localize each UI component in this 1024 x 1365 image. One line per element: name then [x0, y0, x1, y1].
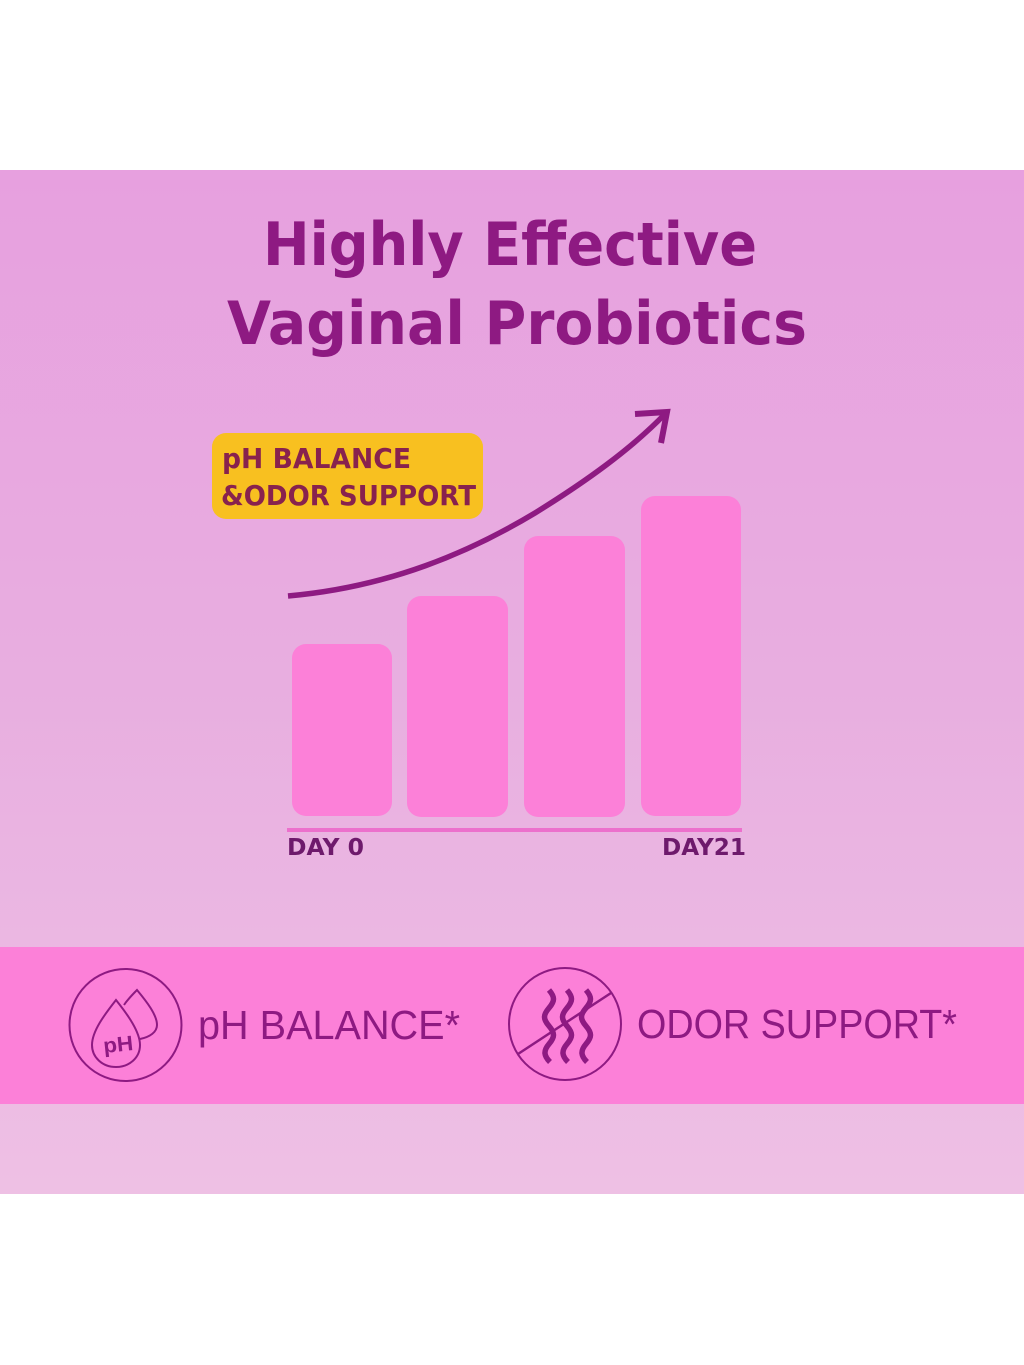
icon: no odor: [509, 968, 621, 1080]
bar chart: [287, 496, 746, 861]
bar: second: [407, 596, 508, 817]
label: odor support: ODOR SUPPORT*: [637, 1001, 957, 1047]
bar: third: [524, 536, 625, 817]
label: day 21: DAY21: [662, 835, 746, 861]
bar: first: [292, 644, 392, 816]
title: Highly Effective: [263, 210, 757, 280]
arrow: upward trend: [288, 412, 667, 596]
callout: pH balance and odor support: pH BALANCE: [222, 442, 411, 475]
icon: pH drops: pH: [102, 1032, 134, 1058]
callout: pH balance and odor support: &ODOR SUPPORT: [221, 479, 476, 512]
bar: fourth: [641, 496, 741, 816]
axis line: [287, 828, 742, 832]
title: [227, 210, 807, 359]
label: pH balance: pH BALANCE*: [198, 1002, 460, 1048]
icon: pH drops: [70, 969, 182, 1081]
benefit band: [0, 947, 1024, 1104]
callout: pH balance and odor support: [212, 433, 483, 519]
title: Vaginal Probiotics: [227, 289, 807, 359]
background panel: [0, 170, 1024, 1194]
label: day 0: DAY 0: [287, 835, 364, 861]
